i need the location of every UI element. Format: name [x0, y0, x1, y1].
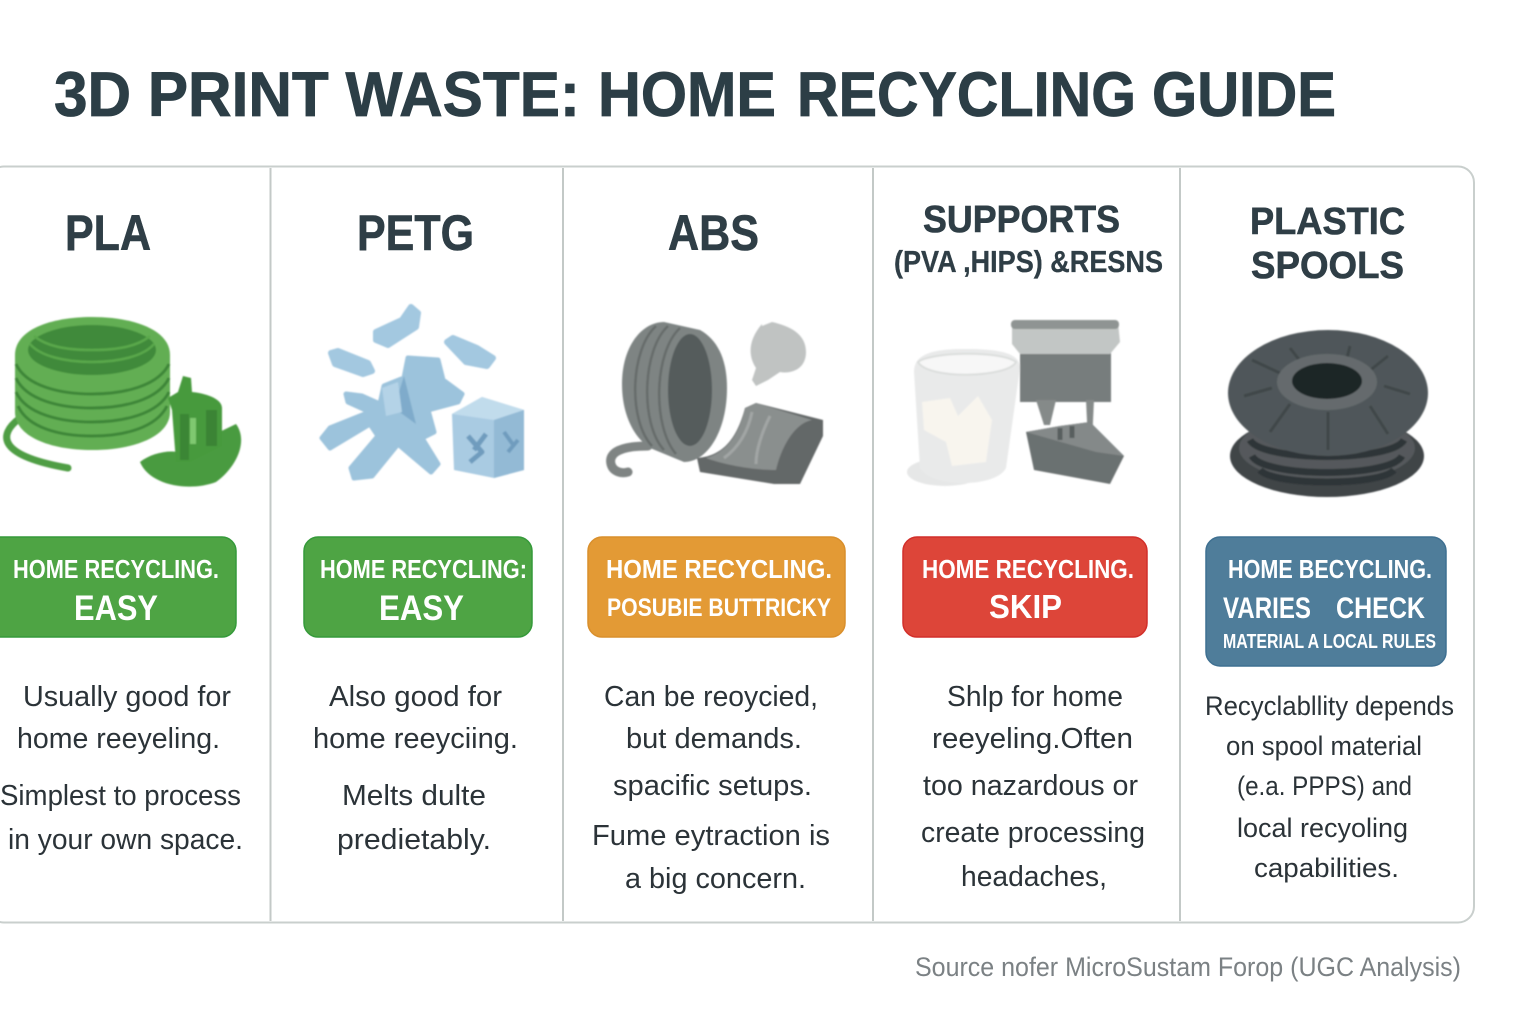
description: PLA: Simplest to process: [0, 780, 241, 812]
status badge: varies: CHECK: [1336, 592, 1425, 625]
description: supports: Shlp for home: [947, 681, 1123, 713]
panel: ABS: [588, 205, 845, 895]
panel: PLA: [0, 205, 243, 856]
heading: supports: SUPPORTS: [923, 199, 1120, 241]
comparison table frame: [0, 166, 1474, 922]
title: RECYCLING: [797, 60, 1136, 130]
title: [54, 60, 1336, 130]
icon: support cup, resin vat and block: [907, 320, 1124, 486]
description: supports: too nazardous or: [923, 770, 1138, 802]
status badge: skip: [903, 537, 1147, 637]
description: PETG: [313, 681, 518, 856]
description: PLA: in your own space.: [8, 824, 243, 856]
description: spools: capabilities.: [1254, 853, 1399, 883]
heading: supports: [894, 199, 1163, 279]
description: spools: on spool material: [1226, 731, 1422, 761]
heading: plastic spools: [1250, 201, 1405, 287]
status badge: possibly tricky: [588, 537, 845, 637]
status badge: varies: [1206, 537, 1446, 666]
description: ABS: [592, 681, 830, 895]
status badge: varies: HOME BECYCLING.: [1228, 554, 1432, 584]
status badge: skip: HOME RECYCLING.: [922, 554, 1134, 584]
description: ABS: Can be reoycied,: [604, 681, 818, 713]
description: ABS: but demands.: [626, 723, 802, 755]
description: supports: headaches,: [961, 861, 1107, 893]
description: PLA: home reeyeling.: [17, 723, 220, 755]
description: PETG: Also good for: [329, 681, 502, 713]
description: PETG: Melts dulte: [342, 780, 486, 812]
status badge: easy: HOME RECYCLING:: [320, 554, 527, 584]
panel: PETG: [304, 205, 532, 856]
status badge: varies: MATERIAL A LOCAL RULES: [1223, 631, 1436, 653]
description: PLA: [0, 681, 243, 856]
status badge: possibly tricky: HOME RECYCLING.: [606, 554, 832, 584]
status badge: varies: VARIES: [1223, 592, 1311, 625]
description: PETG: home reeyciing.: [313, 723, 518, 755]
description: spools: local recyoling: [1237, 813, 1408, 843]
description: ABS: a big concern.: [625, 863, 806, 895]
icon: blue PETG scraps and cube: [322, 307, 524, 478]
source note: Source nofer MicroSustam Forop (UGC Analysis): [915, 952, 1461, 982]
description: ABS: spacific setups.: [613, 770, 812, 802]
panel: supports and resins: [894, 199, 1163, 893]
icon: dark spool: [1228, 330, 1428, 497]
description: supports: [921, 681, 1145, 893]
title: HOME: [598, 60, 776, 130]
heading: PLA: PLA: [65, 205, 151, 261]
description: spools: (e.a. PPPS) and: [1237, 771, 1412, 801]
status badge: easy: [0, 537, 236, 637]
status badge: easy: EASY: [74, 589, 158, 628]
title: GUIDE: [1152, 60, 1336, 130]
heading: plastic spools: PLASTIC: [1250, 201, 1405, 243]
status badge: easy: HOME RECYCLING.: [13, 554, 219, 584]
description: spools: [1205, 691, 1454, 883]
title: 3D PRINT WASTE:: [54, 60, 580, 130]
heading: PETG: PETG: [357, 205, 474, 261]
description: PLA: Usually good for: [23, 681, 231, 713]
description: ABS: Fume eytraction is: [592, 820, 830, 852]
description: supports: create processing: [921, 817, 1145, 849]
heading: supports: (PVA ,HIPS) &RESNS: [894, 244, 1163, 279]
description: supports: reeyeling.Often: [932, 723, 1133, 755]
description: spools: Recyclabllity depends: [1205, 691, 1454, 721]
heading: ABS: ABS: [668, 205, 759, 261]
status badge: skip: SKIP: [989, 588, 1062, 625]
icon: green filament coil and printed boat: [7, 317, 241, 487]
heading: plastic spools: SPOOLS: [1251, 245, 1404, 287]
status badge: easy: EASY: [379, 589, 464, 628]
icon: grey ABS coil, fume cloud and warped part: [611, 322, 823, 484]
status badge: possibly tricky: POSUBIE BUTTRICKY: [607, 594, 831, 622]
panel: plastic spools: [1205, 201, 1454, 883]
description: PETG: predietably.: [337, 824, 491, 856]
status badge: easy: [304, 537, 532, 637]
